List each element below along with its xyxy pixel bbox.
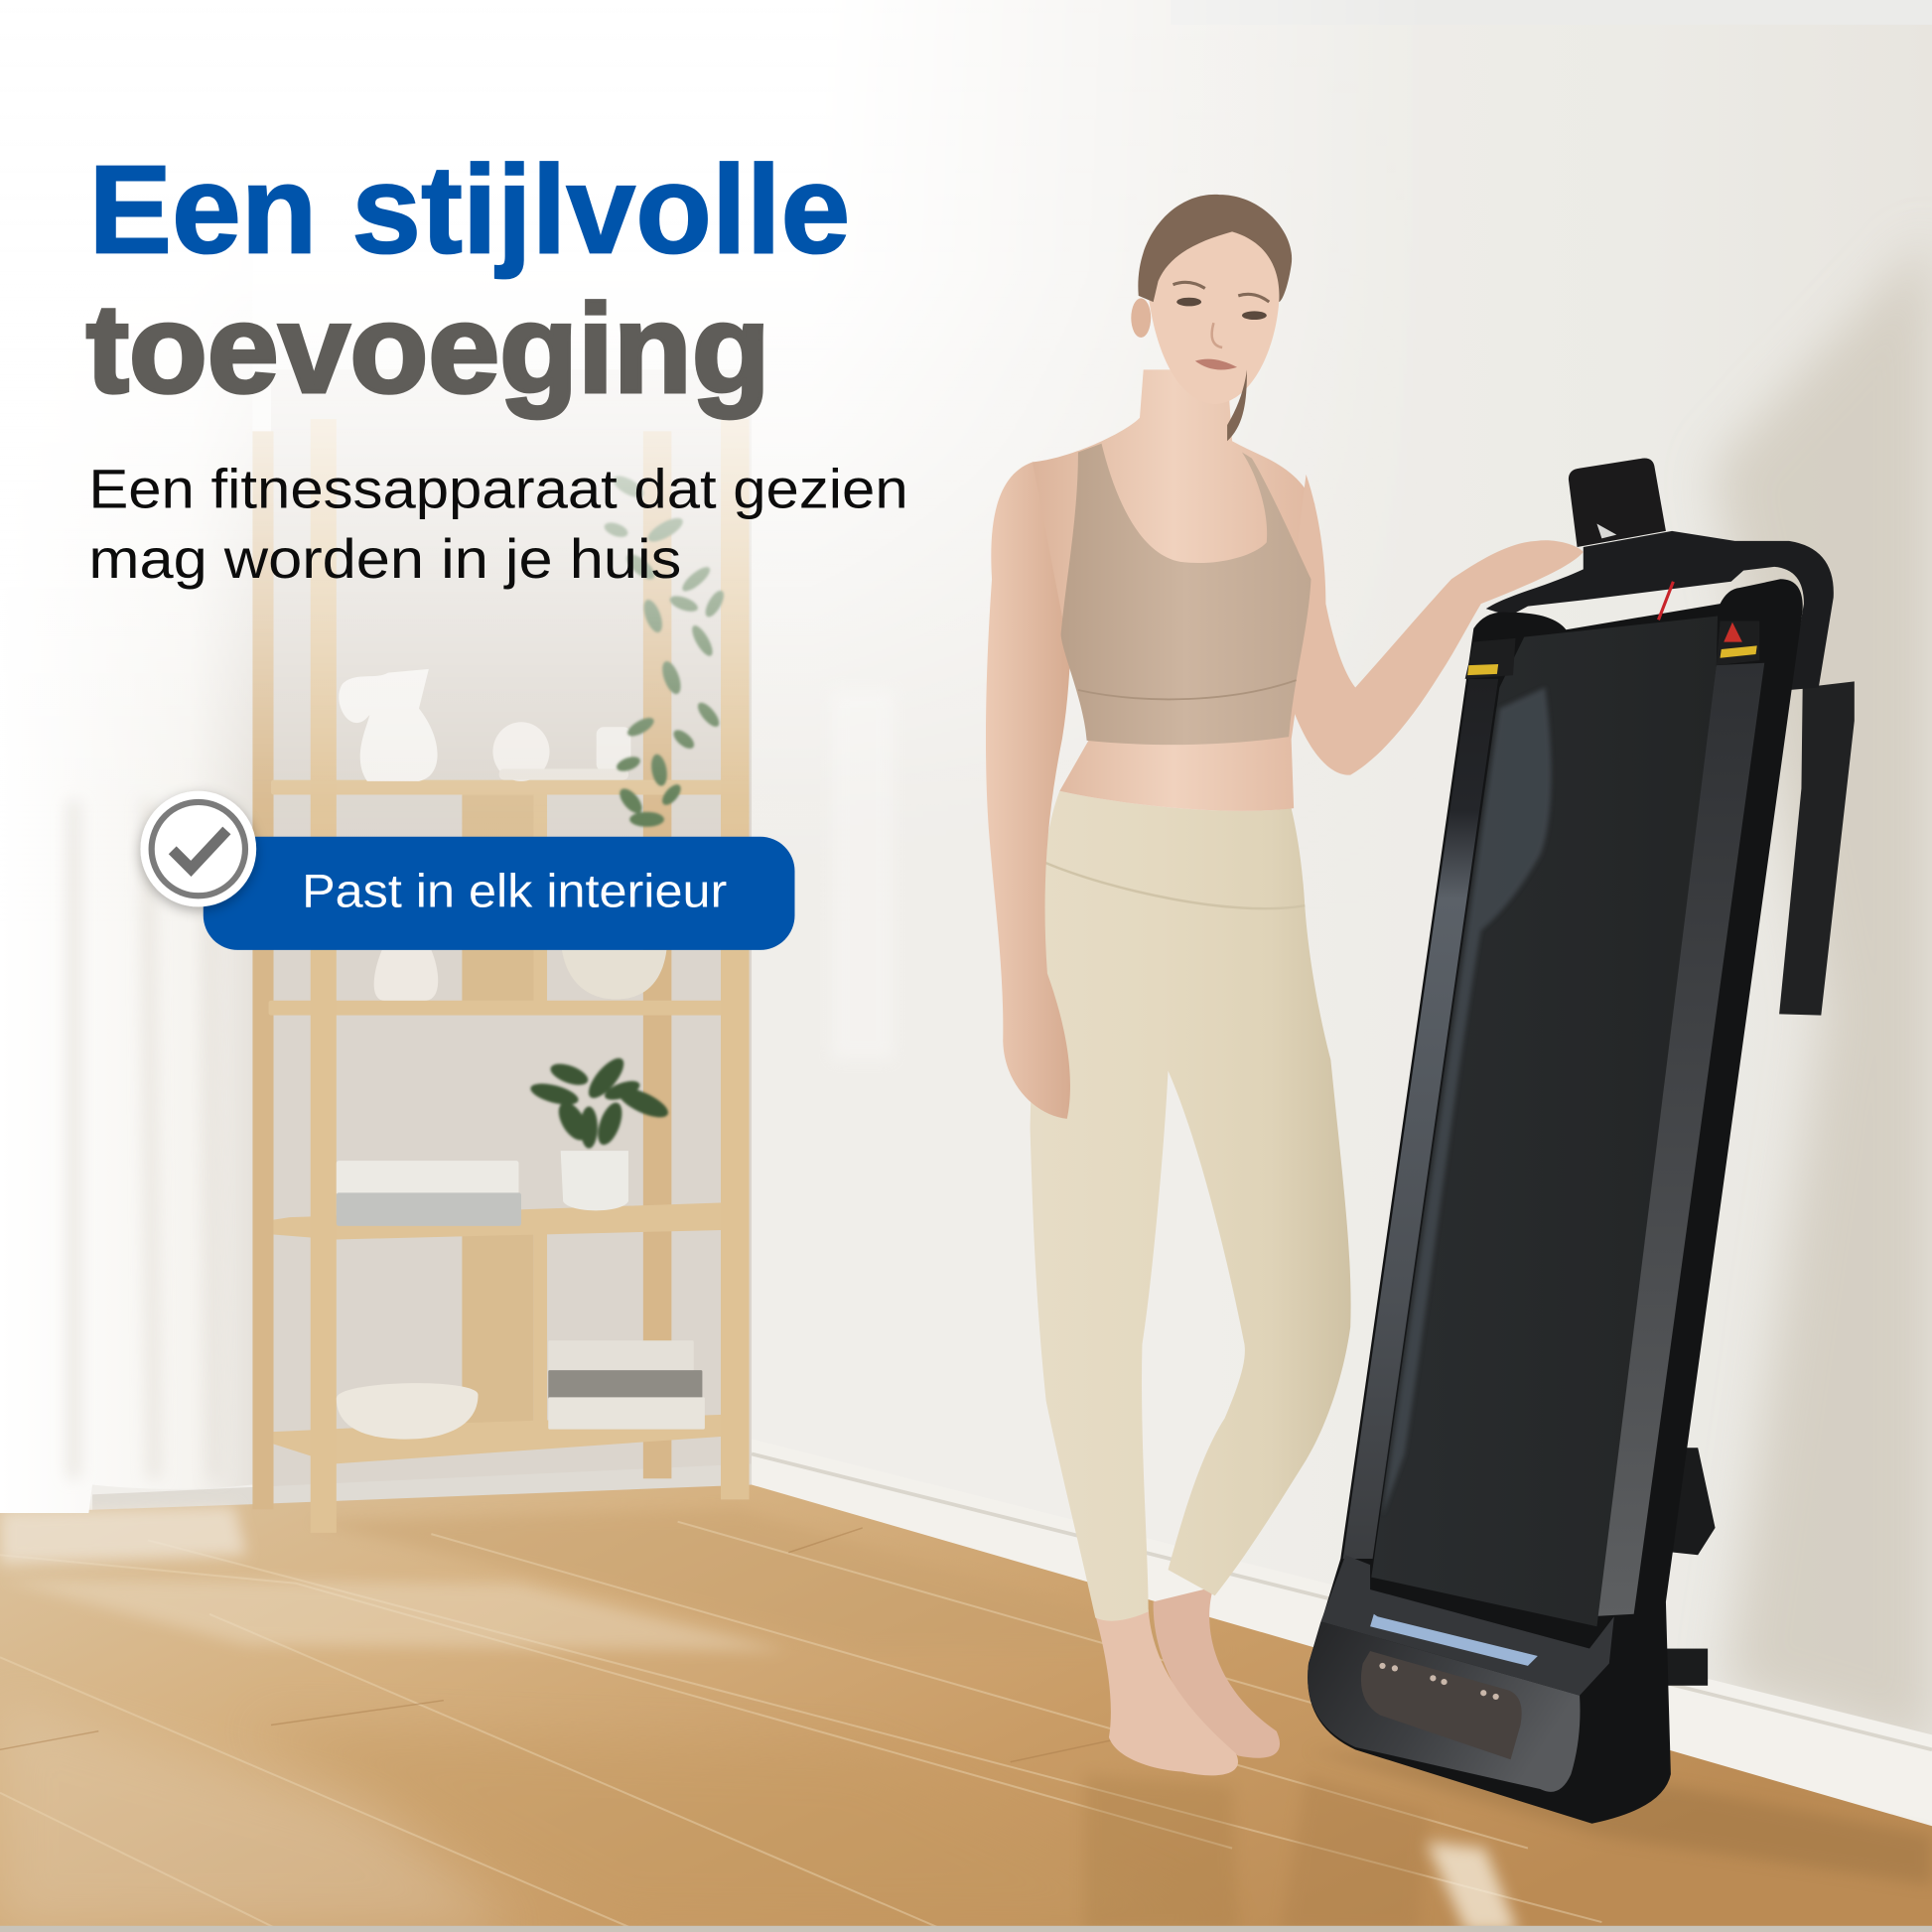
right side rail <box>1589 663 1764 1616</box>
hanging plant <box>603 472 728 827</box>
headline <box>86 138 850 419</box>
facial features <box>1173 282 1269 369</box>
front foot <box>1095 1609 1238 1775</box>
subtitle text: mag worden in je huis <box>88 527 681 590</box>
display window <box>1361 1651 1522 1759</box>
phone holder <box>1569 459 1666 547</box>
icon: check badge <box>140 791 256 906</box>
leggings <box>1031 791 1351 1621</box>
potted plant with books <box>337 1053 705 1430</box>
front console <box>1308 1621 1581 1792</box>
warning labels <box>1465 621 1759 679</box>
wood floor <box>0 1484 1932 1932</box>
heading line 2: toevoeging <box>86 278 770 419</box>
subtitle text: Een fitnessapparaat dat gezien <box>88 457 908 519</box>
running belt <box>1371 617 1718 1626</box>
curtain <box>0 0 252 1513</box>
subtitle text <box>88 457 908 590</box>
wooden shelf <box>252 419 750 1533</box>
back foot <box>1154 1587 1280 1758</box>
head <box>1148 209 1279 404</box>
lit patch on the belt <box>1382 688 1551 1516</box>
white fade overlay behind the text <box>101 0 1155 827</box>
sports bra <box>1061 444 1311 745</box>
torso skin <box>1033 369 1314 811</box>
red safety cord <box>1658 582 1673 620</box>
callout pill <box>204 837 794 950</box>
left side rail <box>1343 679 1498 1559</box>
folded handle bar <box>1486 531 1834 690</box>
right arm and hand <box>1292 475 1584 775</box>
frame body <box>1308 579 1803 1824</box>
deck end trim <box>1320 1555 1614 1696</box>
wall bracket <box>1779 681 1855 1016</box>
hair <box>1138 195 1292 302</box>
baseboard <box>92 1440 1932 1826</box>
woman <box>986 195 1584 1775</box>
shelf decor: pitcher, vases and bowls <box>337 669 666 1440</box>
hinge on the frame side <box>1651 1448 1716 1555</box>
waistband line <box>1044 863 1305 908</box>
callout pill: Past in elk interieur <box>302 864 727 916</box>
heading line 1: Een stijlvolle <box>88 138 850 279</box>
left arm and hand <box>986 462 1084 1119</box>
support block <box>1663 1649 1708 1686</box>
treadmill <box>1308 459 1855 1824</box>
